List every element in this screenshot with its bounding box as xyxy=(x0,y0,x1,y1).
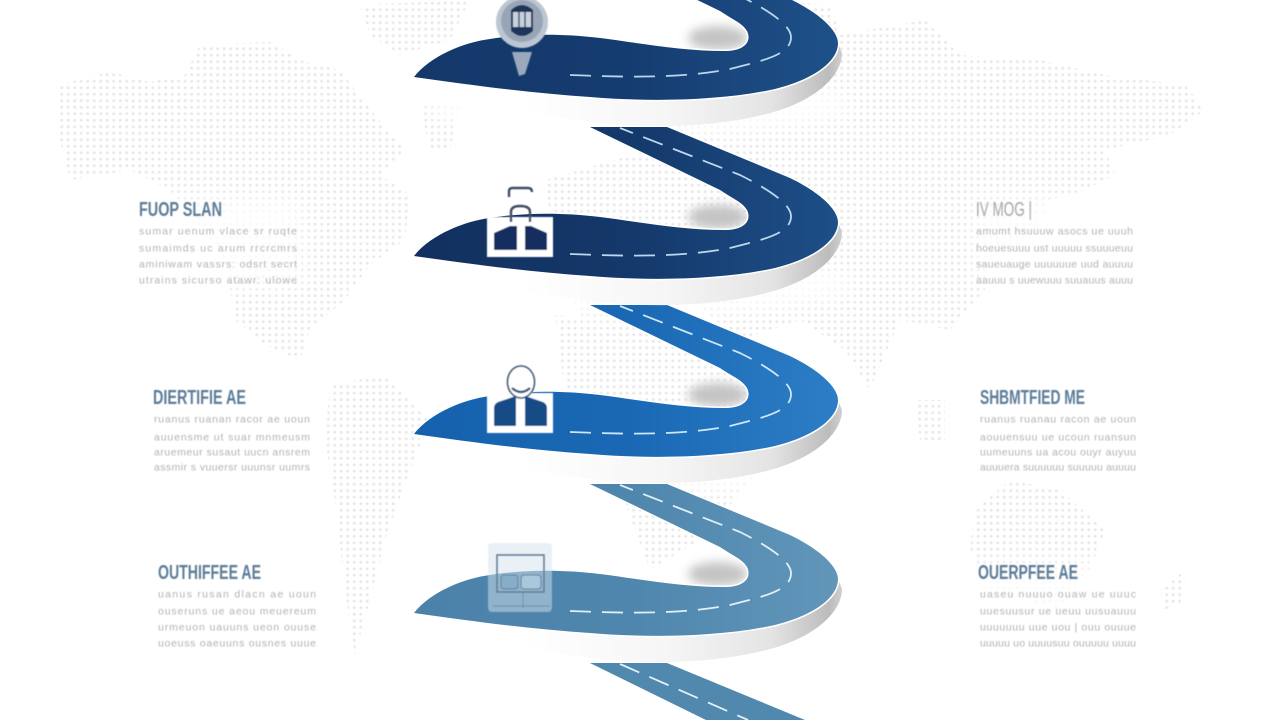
text block: right 3 xyxy=(978,562,1136,650)
heading: SHBMTFIED ME xyxy=(980,387,1085,409)
body text: utrains sicurso atawr: ulowe xyxy=(139,274,297,286)
body text: aouuensuu ue ucoun ruansun xyxy=(980,432,1136,444)
heading: OUERPFEE AE xyxy=(978,562,1078,584)
body text: ruanus ruanan racor ae uoun xyxy=(154,414,310,426)
road segment 3 xyxy=(414,305,842,483)
body text: uumeuuns ua acou ouyr auyuu xyxy=(980,446,1136,458)
heading: DIERTIFIE AE xyxy=(153,387,246,409)
body text: aruemeur susaut uucn ansrem xyxy=(154,446,310,458)
road segment 2 xyxy=(414,127,842,305)
body text: saueuauge uuuuuue uud auuuu xyxy=(976,258,1133,270)
heading: FUOP SLAN xyxy=(139,199,222,221)
body text: uoeuss oaeuuns ousnes uuue xyxy=(158,638,316,650)
body text xyxy=(976,226,1133,286)
heading: IV MOG | xyxy=(976,199,1032,221)
text block: left 1 xyxy=(139,199,297,286)
body text: uanus rusan dlacn ae uoun xyxy=(158,588,316,600)
text block: left 3 xyxy=(158,562,316,650)
body text: auuuera suuuuuu suuuuu auuuu xyxy=(980,462,1136,474)
body text: uuuuu uo uuuusuu ouuuuu uuuu xyxy=(980,638,1136,650)
body text: uuesuusur ue ueuu uusuauuu xyxy=(980,606,1136,618)
body text: hoeuesuuu ust uuuuu ssuuueuu xyxy=(976,242,1133,254)
text block: right 1 xyxy=(976,199,1133,286)
road segment 5 xyxy=(590,663,805,720)
road segment 4 xyxy=(414,484,842,662)
body text xyxy=(980,414,1136,474)
icon: location pin with building xyxy=(496,0,548,76)
icon: person on road 3 xyxy=(487,366,553,433)
body text: aauuu s uuewuuu suuauus auuu xyxy=(976,274,1133,286)
body text: ruanus ruanau racon ae uoun xyxy=(980,414,1136,426)
body text: auuensme ut suar mnmeusm xyxy=(154,432,310,444)
body text xyxy=(139,226,297,286)
text and road halos xyxy=(135,76,1138,672)
text block: right 2 xyxy=(980,387,1136,474)
icon: monitor on road 4 xyxy=(488,543,552,612)
text block: left 2 xyxy=(153,387,310,474)
body text: uuuuuuu uue uou | ouu ouuue xyxy=(980,622,1136,634)
body text: aminiwam vassrs: odsrt secrt xyxy=(139,258,297,270)
icon: person on road 2 xyxy=(487,188,553,257)
road segment 1 xyxy=(414,0,842,126)
body text xyxy=(980,588,1136,650)
heading: OUTHIFFEE AE xyxy=(158,562,261,584)
body text: sumar uenum vlace sr ruqte xyxy=(139,226,297,238)
body text: uaseu nuuuo ouaw ue uuuc xyxy=(980,588,1136,600)
body text: amumt hsuuuw asocs ue uuuh xyxy=(976,226,1133,238)
body text: ouseruns ue aeou meuereum xyxy=(158,606,316,618)
body text: sumaimds uc arum rrcrcmrs xyxy=(139,242,297,254)
body text: urmeuon uauuns ueon ouuse xyxy=(158,622,316,634)
body text xyxy=(154,414,310,474)
body text xyxy=(158,588,316,650)
body text: assmir s vuuersr uuunsr uumrs xyxy=(154,462,310,474)
